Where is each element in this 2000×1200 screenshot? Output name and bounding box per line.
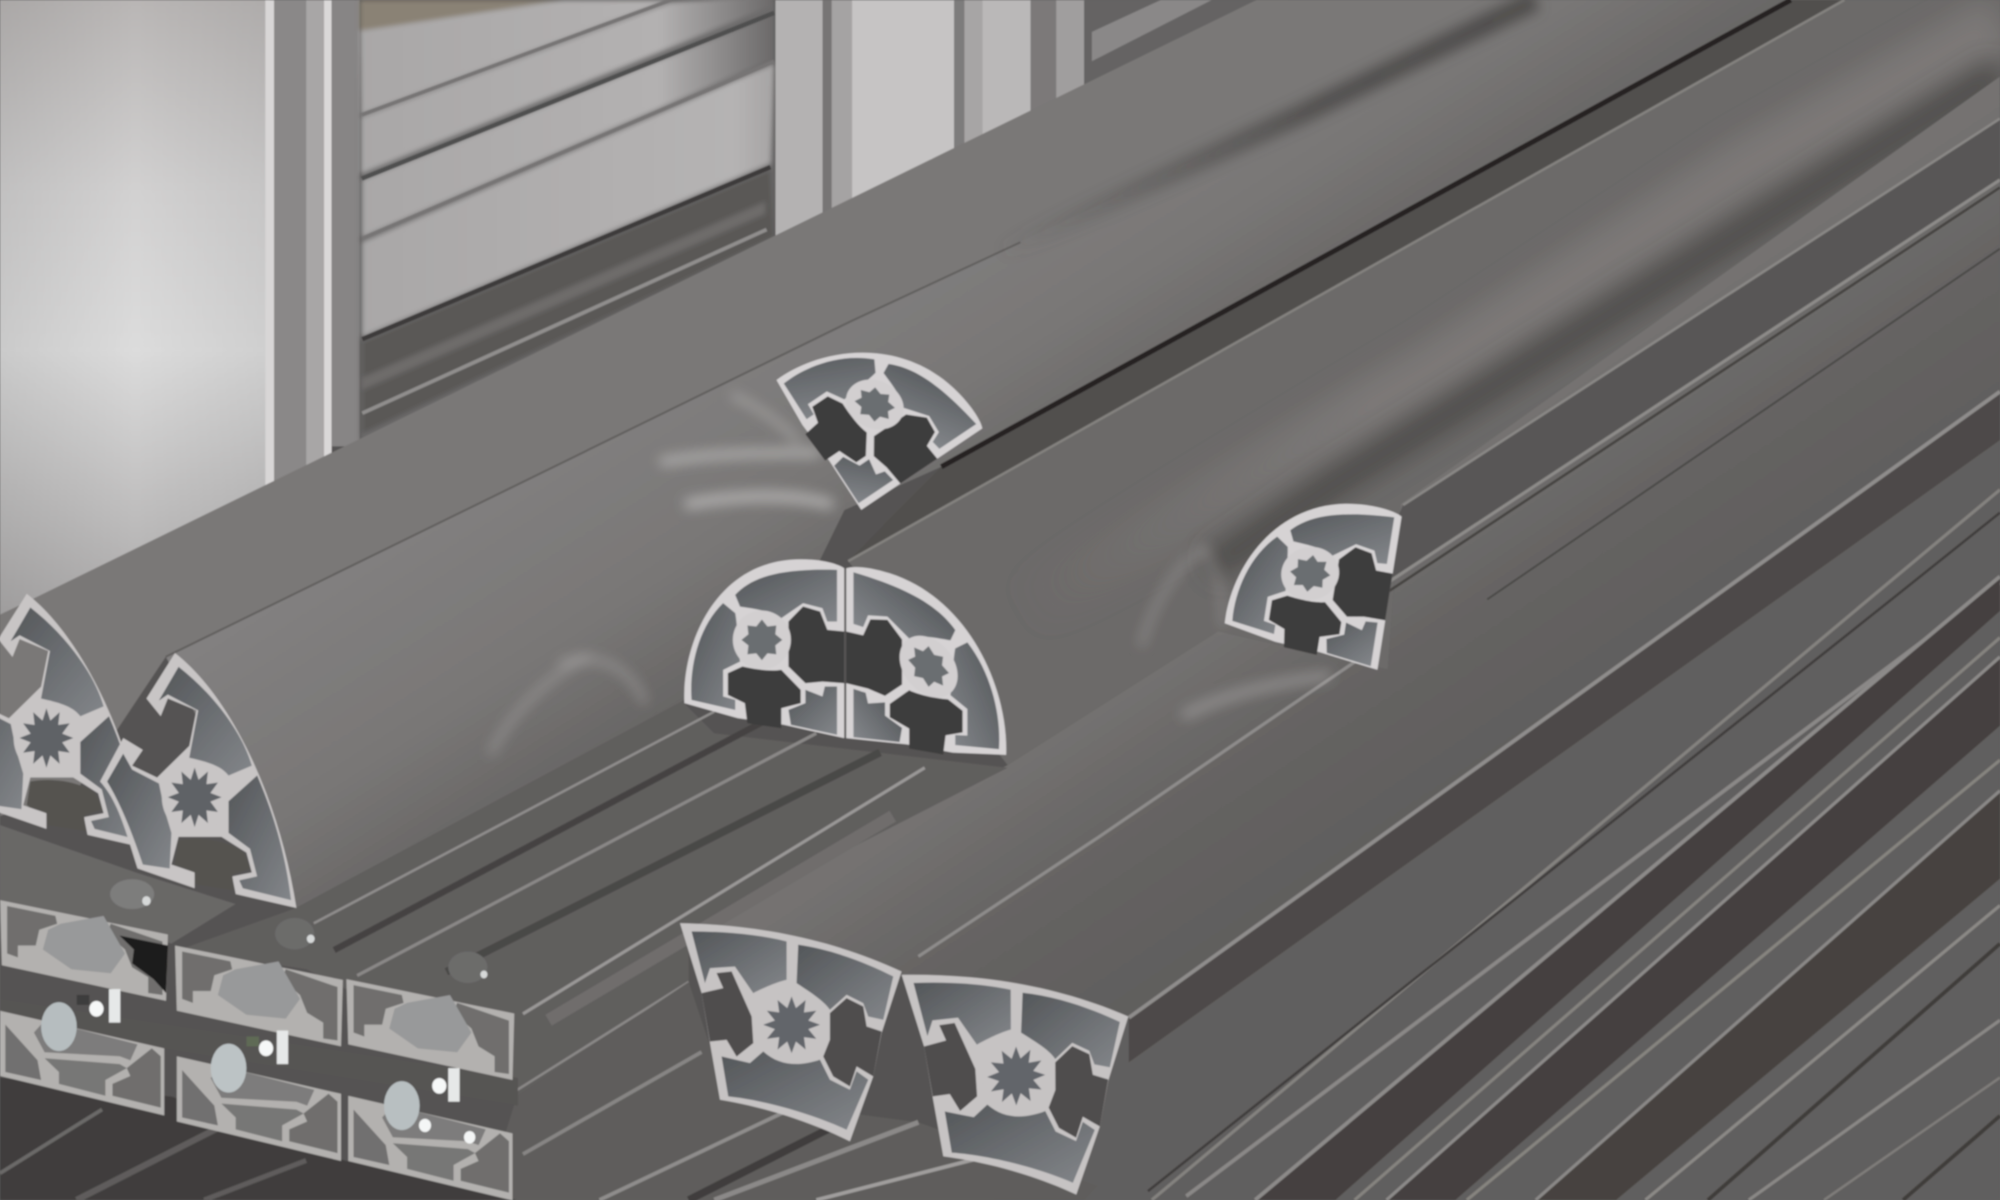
bottom row square 3 (348, 1096, 512, 1200)
double half-round profile surface (848, 0, 2000, 765)
ring-sector section: bottom right (902, 966, 1129, 1200)
polished reflections on round profiles (491, 395, 1327, 752)
square slotted profiles with bolts (0, 825, 518, 1200)
bolt 2 (211, 1031, 288, 1093)
top row square 1 (0, 900, 168, 1001)
dark opening top row (120, 936, 168, 993)
bright rod at louvre base (362, 230, 767, 413)
ring-sector section: far left (0, 594, 148, 849)
grooved band under round profiles (179, 701, 1008, 1097)
far bolt ends (110, 879, 488, 983)
round profile A surface (0, 0, 1790, 816)
top row square 3 (346, 979, 514, 1080)
dark floor lower left (0, 1078, 517, 1200)
dark crease band (848, 0, 1844, 561)
dark band between rows (0, 999, 518, 1106)
half-round section: right small (1220, 493, 1403, 670)
ring-sector section: left (100, 653, 296, 908)
bolt 1 (41, 989, 120, 1051)
louvre shadow lines (362, 0, 774, 339)
half-round section: top (751, 311, 989, 510)
striped profile tops lower right (995, 391, 2000, 1200)
half-round section: double left (684, 559, 844, 738)
upper right louvre (1084, 0, 1288, 96)
bottom row square 2 (177, 1056, 341, 1161)
bolt 3 (384, 1068, 475, 1144)
lower centre profile tops (485, 982, 1097, 1200)
top row square 2 (175, 946, 343, 1046)
grooved surface below the small section (682, 77, 2000, 1020)
half-round section: double right (846, 559, 1006, 790)
ring-sector section: bottom left (680, 923, 902, 1141)
surface above first row (0, 825, 236, 944)
central vertical post (776, 0, 1084, 255)
bottom row square 1 (0, 1011, 164, 1116)
wall on the left (0, 0, 270, 638)
soft dark band between A and B (995, 0, 1536, 255)
louvre slats in the background (360, 0, 776, 440)
round profile B surface (166, 0, 1790, 908)
left vertical post (265, 0, 360, 497)
